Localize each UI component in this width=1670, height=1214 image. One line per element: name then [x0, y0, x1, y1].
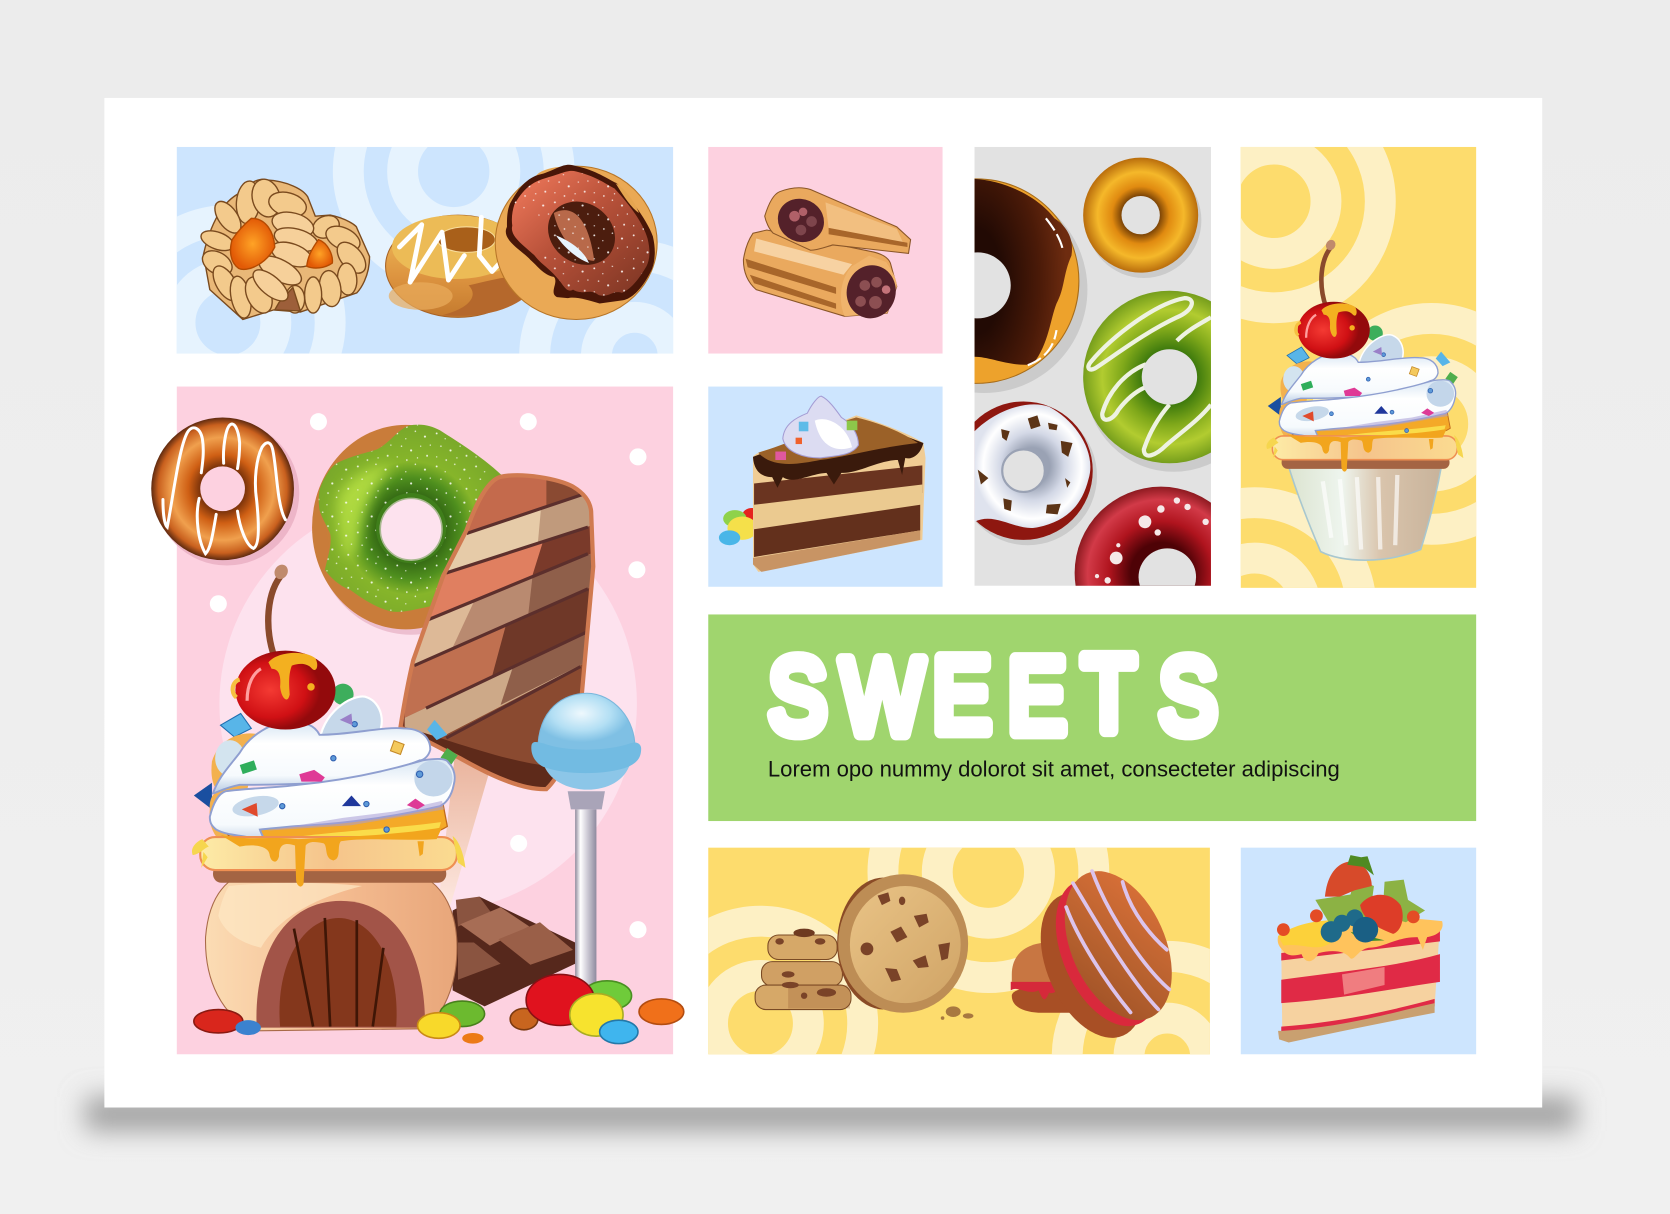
icon: red donut [1074, 486, 1211, 586]
white card [104, 98, 1542, 1108]
icon: cupcake swirl and cherry [1266, 238, 1463, 472]
background dots [210, 413, 646, 938]
icon: small sandwich cookie [1011, 942, 1090, 1013]
icon: lime donut [1083, 290, 1211, 472]
panel: yellow cookies [708, 848, 1210, 1054]
icon: green donut [312, 425, 507, 635]
icon: strawberries and leaves [1277, 855, 1425, 942]
large pale circle [219, 495, 637, 913]
icon: candies [194, 974, 684, 1044]
icon: swirl and cherry topper [192, 562, 465, 887]
panel: blue chocolate cake [708, 387, 943, 587]
icon: jam cookie [198, 176, 371, 320]
icon: chocolate bar [453, 897, 575, 1006]
icon: layered cake slice [753, 415, 926, 572]
icon: cupcake house body [206, 882, 457, 1031]
title: SWEETS [769, 634, 1217, 757]
panel: blue donuts and cookie [176, 147, 674, 354]
icon: plain glazed donut [386, 215, 530, 317]
icon: brown glazed donut [151, 417, 299, 565]
icon: cake slice [1278, 918, 1443, 1043]
panel: yellow cupcake [1240, 146, 1476, 588]
icon: white donut [974, 402, 1097, 546]
panel: green title banner [708, 614, 1476, 821]
icon: lower pastry [743, 230, 901, 323]
panel: pink churros [708, 147, 943, 354]
icon: cupcake wrapper [1288, 456, 1443, 560]
icon: whipped cream [775, 396, 858, 460]
icon: stacked cookies [755, 929, 851, 1010]
icon: candy sprinkles [719, 508, 762, 545]
icon: chocolate donut [974, 178, 1088, 393]
icon: crumbs [941, 1006, 973, 1020]
icon: chocolate donut [495, 164, 657, 319]
panel: blue strawberry cake [1241, 848, 1476, 1054]
subtitle: Lorem opo nummy dolorot sit amet, consecteter adipiscing [768, 756, 1340, 781]
icon: upper pastry [765, 188, 911, 253]
icon: lollipop [531, 693, 641, 990]
panel: gray donuts [974, 147, 1211, 586]
icon: chocolate popsicle [398, 473, 596, 792]
icon: popsicle stick [439, 745, 492, 905]
icon: big sandwich cookie [1016, 855, 1195, 1054]
panel: big pink collage [151, 387, 684, 1054]
icon: orange donut [1083, 158, 1201, 278]
icon: big cookie [837, 874, 968, 1013]
card shadow [85, 1097, 1576, 1131]
